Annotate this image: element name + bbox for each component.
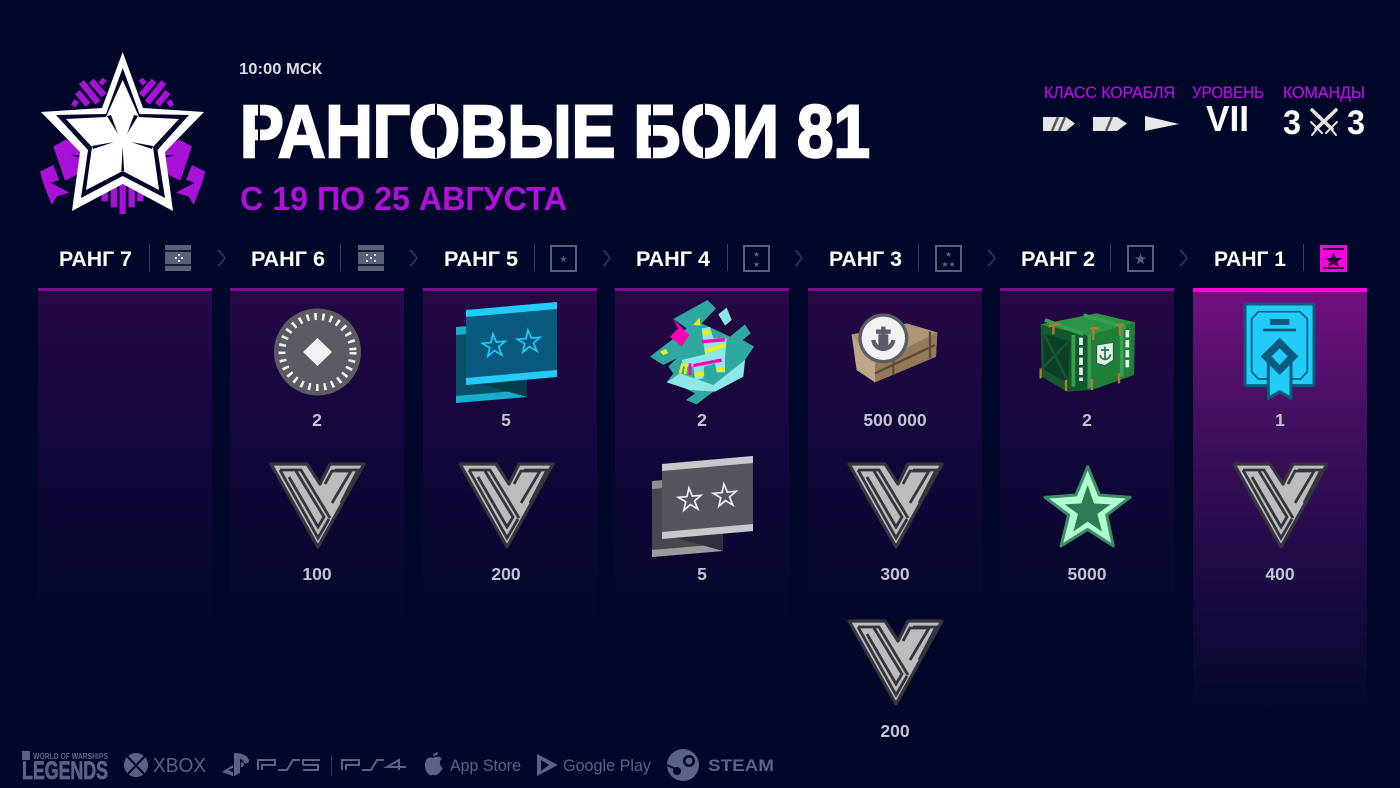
rank header: rank 6 xyxy=(251,244,418,271)
icon: cruiser class xyxy=(1093,117,1127,131)
rank header: rank 4 xyxy=(636,244,803,271)
icon: V token xyxy=(460,464,553,547)
rank header: rank 6: РАНГ 6 xyxy=(251,248,325,271)
rank header: rank 1: РАНГ 1 xyxy=(1214,248,1286,271)
reward count: 300 xyxy=(880,564,910,584)
logo: App Store xyxy=(425,752,521,775)
battle info: tier: VII xyxy=(1206,98,1249,139)
panel: rank 6 xyxy=(230,288,404,640)
reward count: 5 xyxy=(501,410,511,430)
panel: rank 4 xyxy=(615,288,789,640)
reward count: 2 xyxy=(312,410,322,430)
logo: PS5 and PS4 xyxy=(222,753,406,776)
reward count: 200 xyxy=(491,564,521,584)
battle info: ship class xyxy=(1043,83,1179,131)
footer: platform logos xyxy=(22,749,774,785)
battle info: teams: 3 xyxy=(1347,104,1365,142)
battle info: tier: УРОВЕНЬ xyxy=(1192,83,1264,102)
icon: destroyer class xyxy=(1043,117,1075,131)
reward count: 100 xyxy=(302,564,332,584)
rank header: rank 3: ★ xyxy=(945,250,952,259)
panel: rank 2 xyxy=(1000,288,1174,640)
panel: rank 7 xyxy=(38,288,212,640)
logo: Steam xyxy=(667,749,774,781)
icon: pinata camouflage xyxy=(650,300,754,404)
icon: grey flags xyxy=(652,456,753,557)
logo: Steam: STEAM xyxy=(708,756,774,775)
title: РАНГОВЫЕ БОИ 81 xyxy=(240,90,870,173)
time label: 10:00 МСК xyxy=(239,61,322,78)
rank header: rank 4: РАНГ 4 xyxy=(636,248,710,271)
logo: Google Play: Google Play xyxy=(563,756,651,775)
rank header: rank 4: ★ xyxy=(753,250,760,259)
rank header: rank 4: ★ xyxy=(753,260,760,269)
rank header: rank 5: ★ xyxy=(559,254,568,264)
icon: blue flags xyxy=(456,302,557,403)
icon: V token xyxy=(849,464,942,547)
panel: rank 3 xyxy=(808,288,982,640)
icon: blue certificate xyxy=(1245,304,1314,398)
icon: green star xyxy=(1045,467,1130,546)
icon: signal coin xyxy=(274,308,361,396)
icon: V token xyxy=(271,464,364,547)
battle info: teams: 3 xyxy=(1283,104,1301,142)
logo: Xbox xyxy=(124,753,206,777)
logo: World of Warships Legends xyxy=(22,751,109,785)
logo: Google Play xyxy=(537,754,651,776)
logo: World of Warships Legends: LEGENDS xyxy=(22,757,108,785)
rank header: rank 7: РАНГ 7 xyxy=(59,248,132,271)
panel: rank 5 xyxy=(423,288,597,640)
subtitle: dates: С 19 ПО 25 АВГУСТА xyxy=(240,180,567,217)
rank header: rank 2: РАНГ 2 xyxy=(1021,248,1095,271)
reward count (third row): 200 xyxy=(880,721,910,741)
logo: World of Warships Legends: WORLD OF WARSHIPS xyxy=(33,752,109,761)
rank header: rank 7 xyxy=(59,244,226,271)
reward count: 5 xyxy=(697,564,707,584)
logo: star emblem xyxy=(40,52,205,214)
icon: crossed swords xyxy=(1311,110,1337,135)
rank header: rank 2: ★ xyxy=(1134,251,1147,268)
reward count: 5000 xyxy=(1068,564,1107,584)
reward count: 500 000 xyxy=(863,410,927,430)
reward count: 1 xyxy=(1275,410,1285,430)
icon: credits crate xyxy=(852,313,937,382)
logo: App Store: App Store xyxy=(450,756,521,775)
rank header: rank 3 xyxy=(829,244,996,271)
battle info: tier xyxy=(1192,83,1264,139)
reward count: 2 xyxy=(697,410,707,430)
rank header: rank 3: РАНГ 3 xyxy=(829,248,902,271)
rank header: rank 3: ★★ xyxy=(941,260,956,269)
rank header: rank 5: РАНГ 5 xyxy=(444,248,518,271)
icon: battleship class xyxy=(1145,116,1179,131)
rank header: rank 1 xyxy=(1214,244,1347,272)
icon: V token xyxy=(1234,464,1327,547)
panel: rank 1 xyxy=(1193,288,1367,720)
rank header: rank 5 xyxy=(444,244,611,271)
logo: Xbox: XBOX xyxy=(153,755,206,777)
battle info: teams xyxy=(1283,83,1365,142)
rank header: rank 2 xyxy=(1021,244,1188,271)
battle info: ship class: КЛАСС КОРАБЛЯ xyxy=(1044,83,1175,102)
reward count: 400 xyxy=(1265,564,1295,584)
reward count: 2 xyxy=(1082,410,1092,430)
battle info: teams: КОМАНДЫ xyxy=(1283,83,1365,102)
icon: V token (third row) xyxy=(849,621,942,704)
icon: green container xyxy=(1041,313,1135,392)
